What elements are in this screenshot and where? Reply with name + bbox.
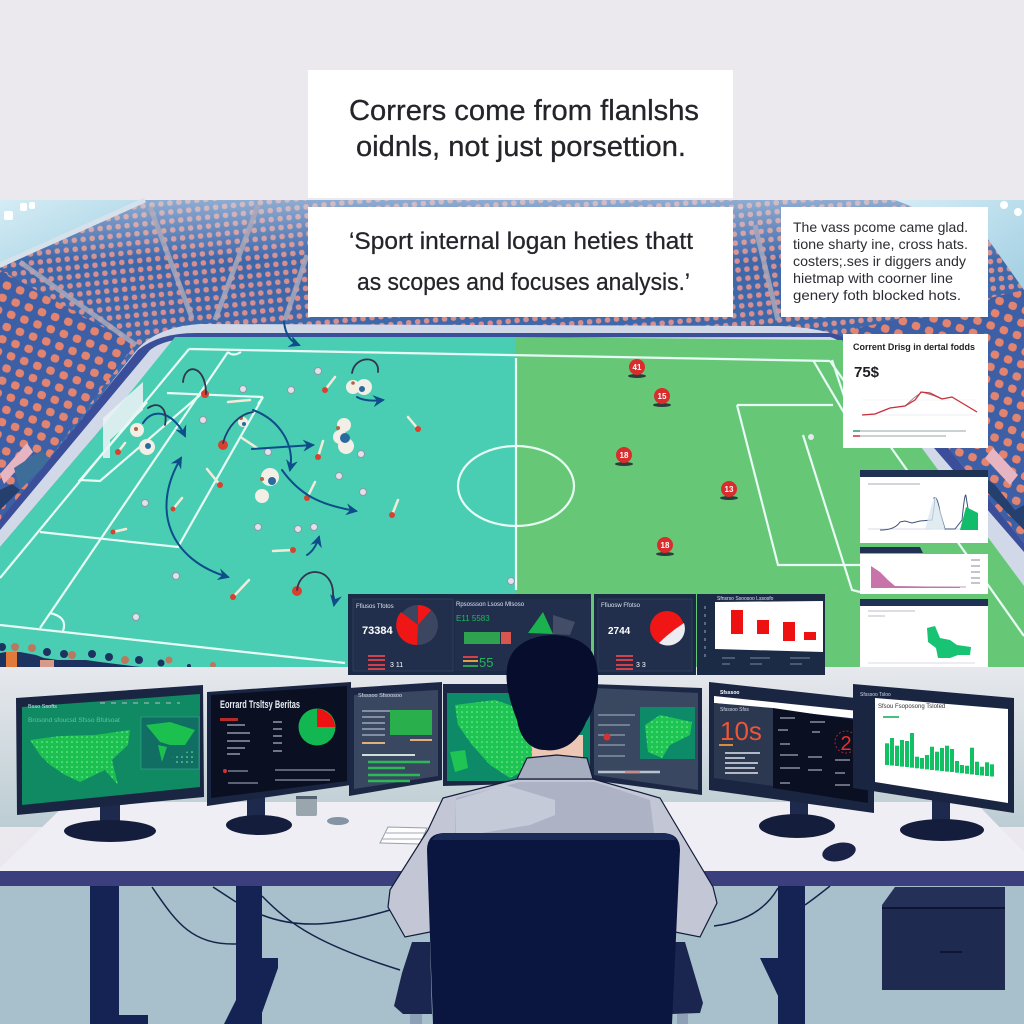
monitor: green bar chart: Sfsou Fsoposong Tsloted [878,704,945,710]
floor under the desk [0,885,1024,1024]
upper monitor row [348,594,825,675]
text block, top right: tione sharty ine, cross hats. [793,236,968,252]
text block, top right [781,207,988,317]
cables [152,886,830,970]
monitor: red pie and green triangle: 73384 [362,625,393,637]
chair back [427,833,680,1024]
cabinet [882,887,1005,990]
desk legs [90,886,805,1024]
numbered red player markers on the right half: 18 [661,541,670,550]
chair legs [410,1014,688,1024]
monitor: 10s stats: Sfsssoo [720,690,739,696]
monitor: red bar chart: Sfnsrso Ssoosoo Lssosfo [717,596,774,602]
panel: line chart 75$: Corrent Drisg in dertal fodds [853,342,975,353]
monitor: red pie and green triangle: 55 [479,655,493,670]
monitor: world map [590,684,702,795]
analyst seated at desk [388,635,717,1024]
numbered red player markers on the right half: 18 [620,451,629,460]
desk items: jar, coaster, keyboard, mouse [296,796,857,864]
wall behind the desk [0,667,1024,827]
signage on stands [0,443,1024,530]
numbered red player markers on the right half: 15 [658,392,667,401]
monitor: green bar chart [853,684,1014,841]
monitor: USA map: Bsso Ssofts [28,704,57,710]
text block, top right: hietmap with coorner line [793,270,953,286]
monitor: 10s stats: 10s [720,716,762,746]
monitor: dashboard with bars: Sfsssoo Sfsoosoo [358,693,402,699]
monitor: red and white pie: 2744 [608,626,631,637]
panel: pink area chart [860,547,988,594]
numbered red player markers on the right half: 41 [633,363,642,372]
panel: line chart 75$ [843,334,988,448]
monitor: red pie and green triangle: 3 11 [390,662,403,669]
movement arrows [143,322,383,605]
panel: peaks chart [860,470,988,543]
title card: oidnls, not just porsettion. [356,131,686,163]
subtitle card: as scopes and focuses analysis.’ [357,269,690,296]
monitor: USA map: Brosond sfoucsd Sfsso Bfulsoat [28,717,120,724]
tactical players and balls on the left half [110,368,514,620]
title card: Corrers come from flanlshs [349,95,699,127]
monitor: red and white pie: 3 3 [636,662,646,669]
panel: green shape chart [860,599,988,672]
monitor: 10s stats: Sfsssoo Sfss [720,707,749,713]
monitor: centre map [443,684,592,786]
text block, top right: costers;.ses ir diggers andy [793,253,966,269]
monitor: 10s stats [709,682,874,838]
monitor: red pie and green triangle: E11 5583 [456,614,490,623]
chair arms [394,942,432,1014]
monitor: red pie and green triangle [348,594,591,675]
monitor: red and white pie [594,594,696,675]
subtitle card [308,207,733,317]
title card [308,70,733,198]
football pitch [0,337,1024,668]
stadium rim band [0,324,1024,590]
subtitle card: ‘Sport internal logan heties thatt [349,228,693,255]
panel: line chart 75$: 75$ [854,364,880,381]
monitor: red pie and green triangle: Rpsossson Lsoso Mlsoso [456,602,525,608]
monitor: 10s stats: 2 [840,733,852,755]
numbered red player markers on the right half [615,359,814,556]
monitor: dark pie [207,682,351,835]
monitor: red and white pie: Ffiuosw Ffotso [601,603,641,609]
monitor: red pie and green triangle: Ffiusos Tfotos [356,604,394,610]
monitor: red bar chart [697,594,825,675]
shirt collar [517,755,593,779]
text block, top right: genery foth blocked hots. [793,287,961,303]
text block, top right: The vass pcome came glad. [793,219,968,235]
neck [532,735,583,765]
stadium stands with crowd [0,200,1024,560]
monitor: green bar chart: Sfsssoo Tsloo [860,692,891,698]
monitor: dark pie: Eorrard Trsltsy Beritas [220,699,300,711]
numbered red player markers on the right half: 13 [725,485,734,494]
monitor: dashboard with bars [349,682,442,796]
hair [506,635,598,750]
goal [103,382,143,458]
spectators row, bottom left [0,643,216,668]
desk [0,802,1024,1024]
monitor: USA map [16,685,204,842]
shirt [388,779,717,937]
